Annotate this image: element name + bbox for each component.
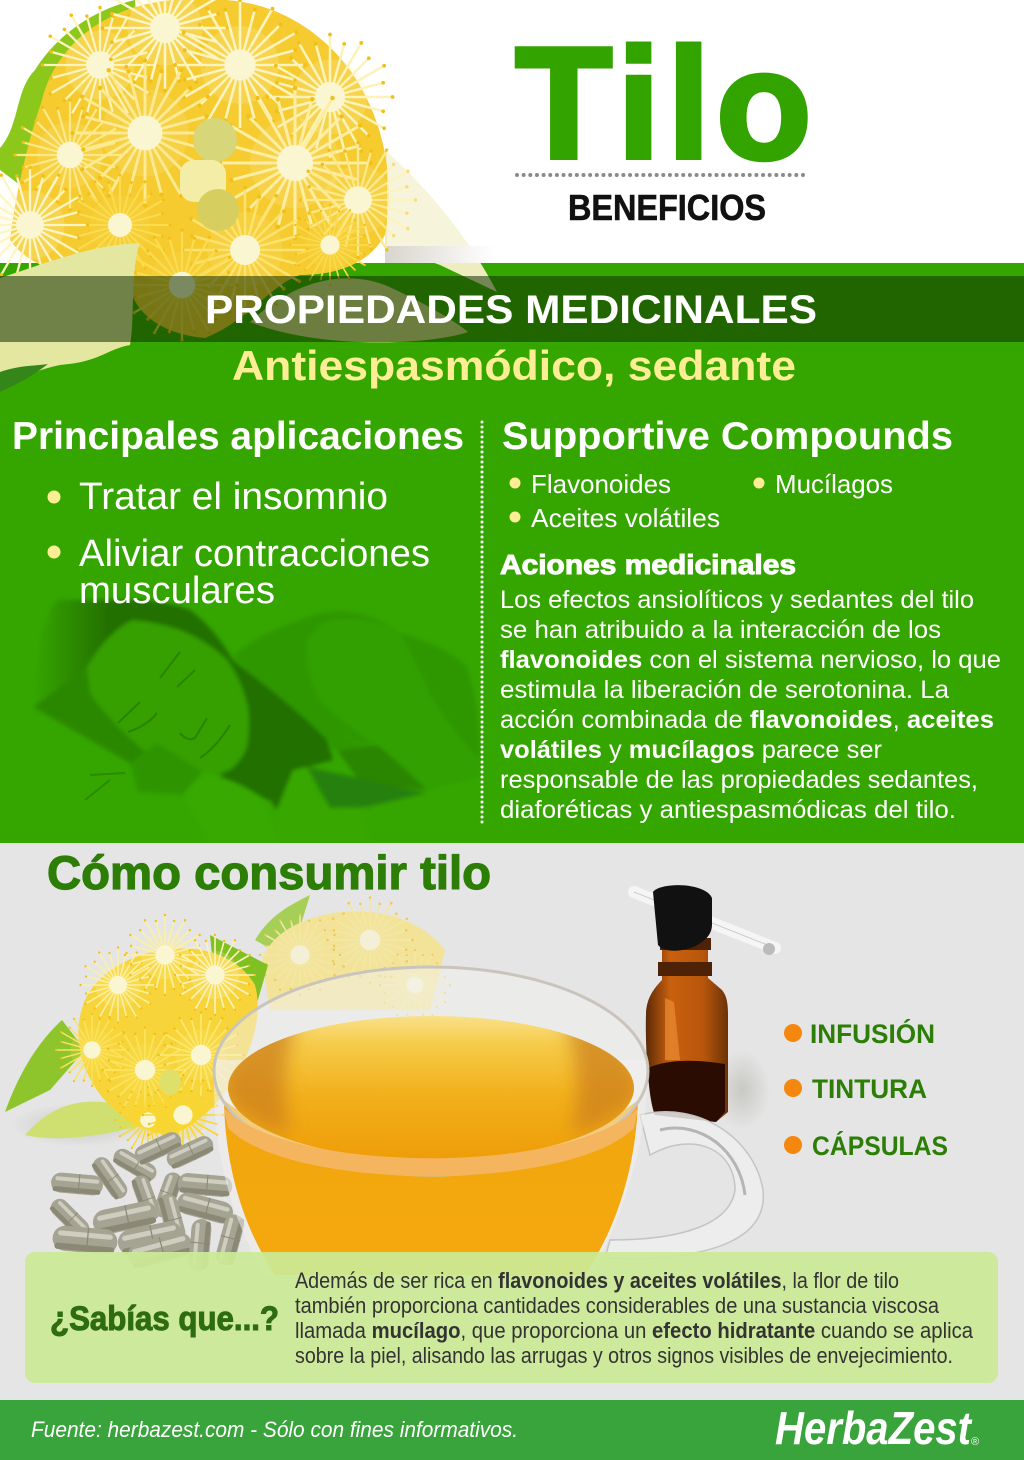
heading: supportive compounds: Supportive Compounds	[502, 415, 953, 458]
bullet: contracciones	[48, 533, 430, 612]
illustration: capsules	[47, 1129, 246, 1272]
title: Tilo: Tilo	[514, 15, 814, 197]
text block: medicinal actions: acción combinada de flavonoides, aceites	[500, 706, 994, 734]
illustration: faded flowers	[255, 895, 450, 1020]
callout: sabías que	[25, 1252, 998, 1383]
option: tintura: TINTURA	[812, 1074, 927, 1104]
subtitle: Beneficios: BENEFICIOS	[568, 187, 766, 228]
column divider	[480, 422, 484, 826]
compound: flavonoides: Flavonoides	[531, 469, 671, 499]
illustration: glass tea cup	[214, 967, 763, 1275]
text block: medicinal actions: flavonoides con el sistema nervioso, lo que	[500, 646, 1001, 674]
callout heading: ¿Sabías que...?	[50, 1300, 279, 1338]
band: dark title strip	[0, 276, 1024, 342]
panel: principales aplicaciones	[12, 415, 464, 612]
illustration: flower cluster	[5, 915, 268, 1155]
callout text: sobre la piel, alisando las arrugas y otros signos visibles de envejecimiento.	[295, 1343, 953, 1368]
text block: medicinal actions: Los efectos ansiolíticos y sedantes del tilo	[500, 586, 974, 614]
option: infusión: INFUSIÓN	[810, 1018, 935, 1049]
illustration: linden flowers header	[0, 0, 502, 392]
bullet: contracciones: Aliviar contracciones	[79, 533, 430, 575]
compound: mucílagos: Mucílagos	[775, 469, 893, 499]
logo: HerbaZest: HerbaZest	[775, 1402, 972, 1454]
dotted title divider	[517, 173, 808, 177]
footer bar	[0, 1400, 1024, 1460]
option: cápsulas: CÁPSULAS	[812, 1130, 948, 1161]
compound: aceites volátiles: Aceites volátiles	[531, 503, 720, 533]
heading: Propiedades medicinales: PROPIEDADES MEDICINALES	[205, 288, 817, 332]
bullet: contracciones: musculares	[79, 570, 275, 612]
panel: supportive compounds	[500, 415, 1001, 824]
heading: aciones medicinales: Aciones medicinales	[500, 549, 796, 580]
text block: medicinal actions: se han atribuido a la interacción de los	[500, 616, 941, 644]
illustration: dropper bottle	[634, 885, 775, 1130]
options list	[784, 1018, 948, 1161]
illustration: sleeping woman	[34, 598, 480, 810]
text block: medicinal actions: diaforéticas y antiespasmódicas del tilo.	[500, 796, 956, 824]
callout text	[295, 1268, 974, 1368]
text block: medicinal actions: responsable de las propiedades sedantes,	[500, 766, 978, 794]
footer source: Fuente: herbazest.com - Sólo con fines informativos.	[31, 1417, 518, 1442]
callout text: llamada mucílago, que proporciona un efecto hidratante cuando se aplica	[295, 1318, 974, 1343]
text block: medicinal actions: volátiles y mucílagos parece ser	[500, 736, 882, 764]
callout text: también proporciona cantidades considerables de una sustancia viscosa	[295, 1293, 940, 1318]
panel: grey consumption section	[0, 843, 1024, 1400]
heading: cómo consumir tilo: Cómo consumir tilo	[47, 846, 491, 899]
text block: medicinal actions	[500, 586, 1001, 824]
logo: HerbaZest: ®	[971, 1436, 979, 1448]
heading: principales aplicaciones: Principales aplicaciones	[12, 415, 464, 458]
callout text: Además de ser rica en flavonoides y aceites volátiles, la flor de tilo	[295, 1268, 899, 1293]
text block: medicinal actions: estimula la liberación de serotonina. La	[500, 676, 949, 704]
panel: green properties section	[0, 263, 1024, 843]
bullet: insomnio: Tratar el insomnio	[79, 476, 388, 518]
subheading: Antiespasmódico, sedante: Antiespasmódico, sedante	[232, 342, 796, 389]
